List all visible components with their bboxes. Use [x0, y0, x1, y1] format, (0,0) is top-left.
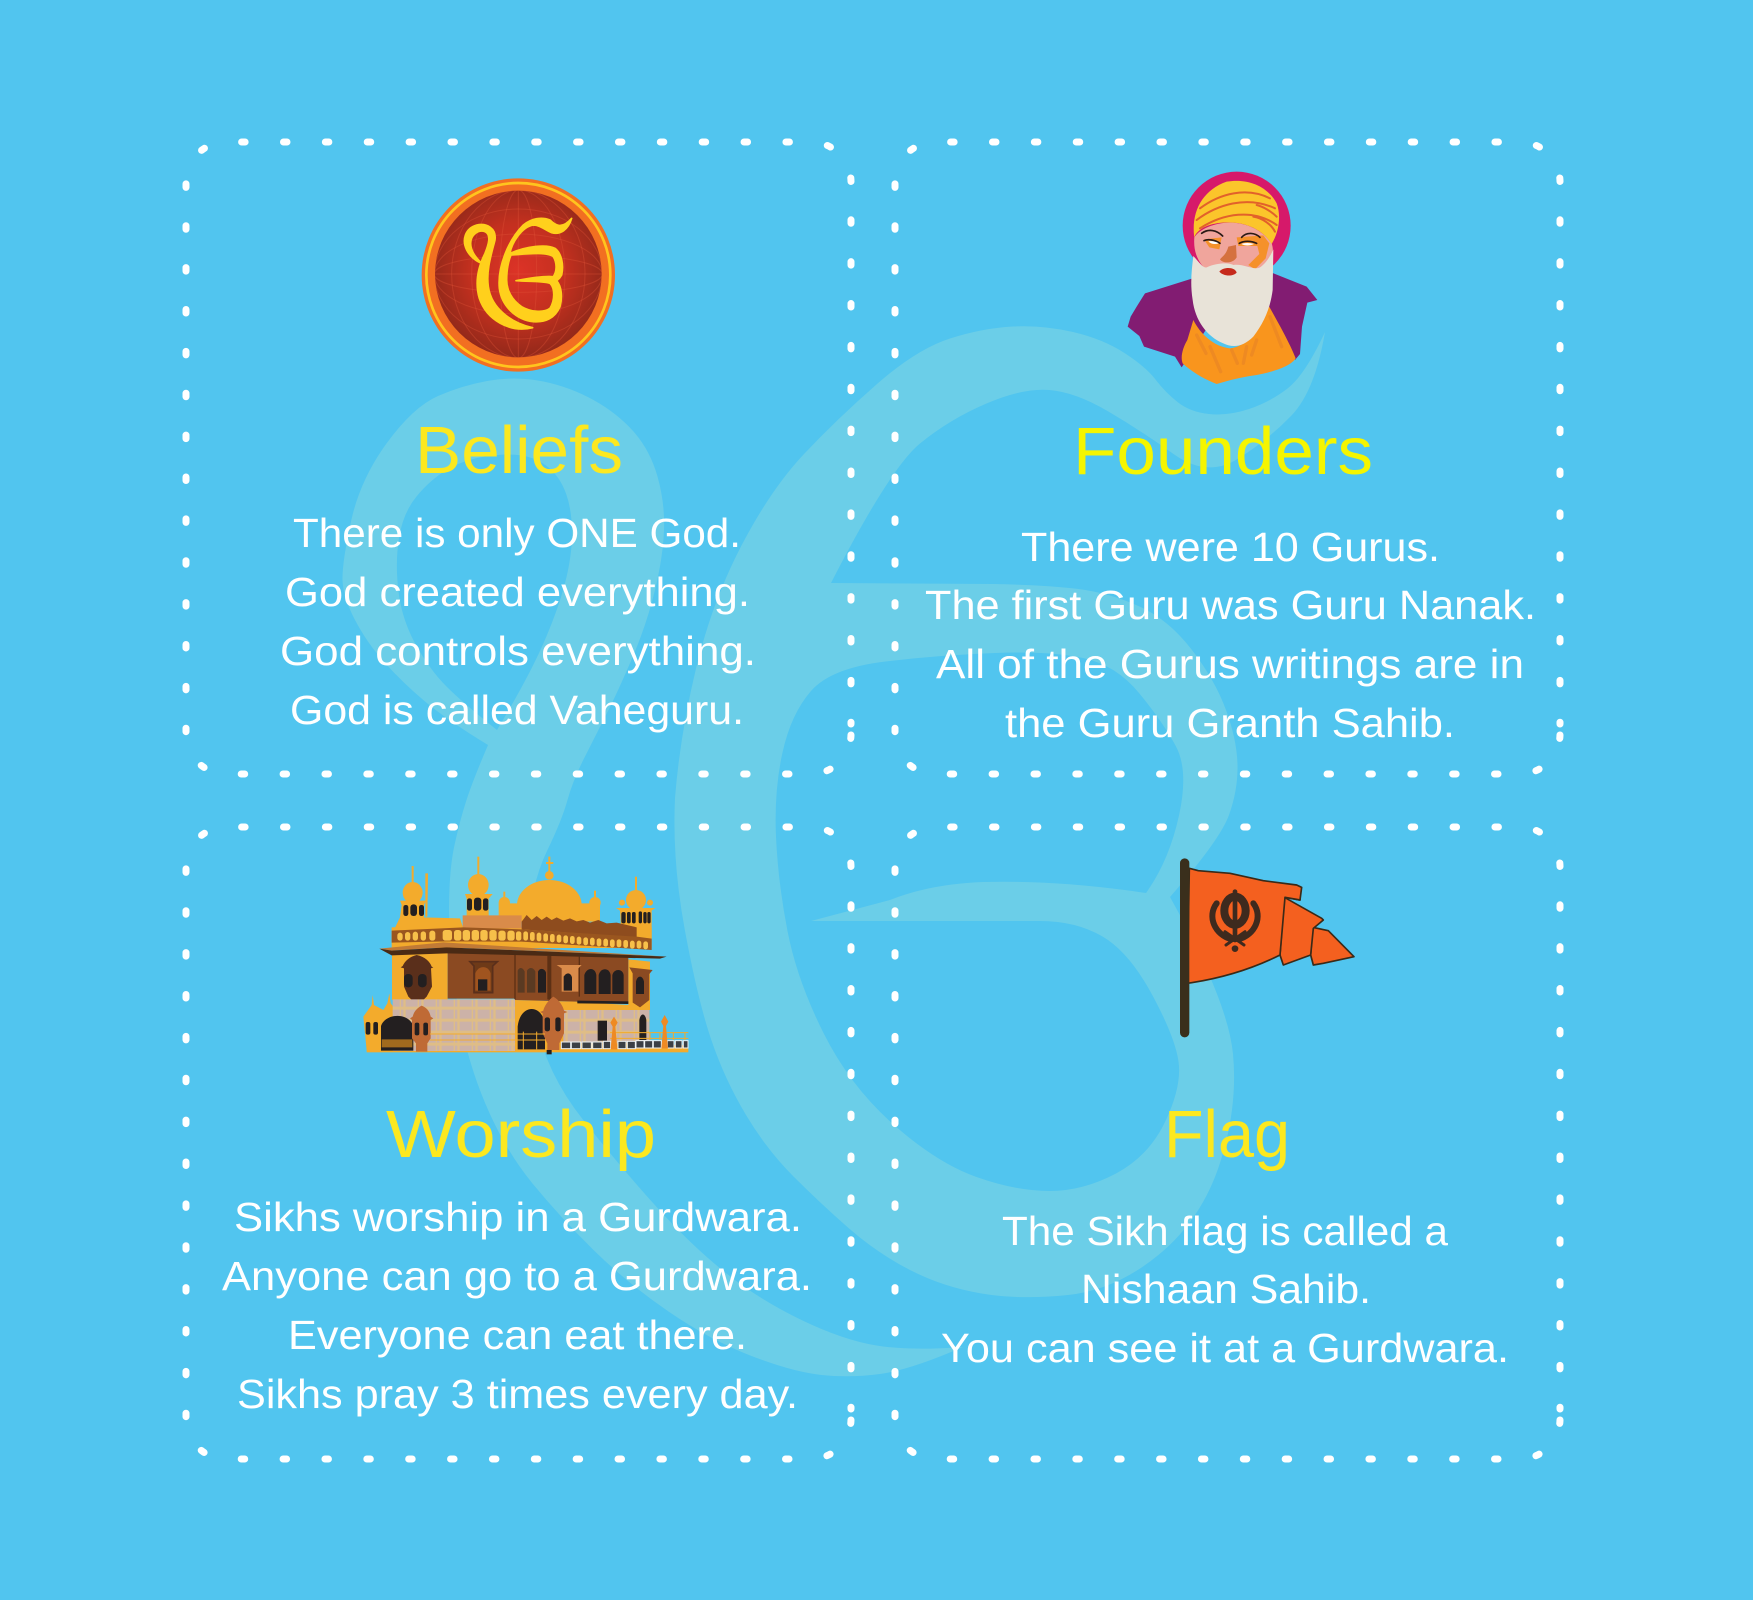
text block: beliefs: God is called Vaheguru.	[290, 687, 744, 733]
icon: Golden Temple	[363, 857, 688, 1054]
text block: founders: All of the Gurus writings are in	[936, 641, 1524, 687]
panel: founders	[895, 142, 1560, 774]
text block: beliefs	[280, 510, 756, 733]
text block: worship: Sikhs worship in a Gurdwara.	[234, 1194, 802, 1240]
text block: founders	[925, 524, 1536, 746]
text block: flag: The Sikh flag is called a	[1002, 1208, 1448, 1254]
text block: beliefs: God controls everything.	[280, 628, 756, 674]
heading: founders: Founders	[1073, 414, 1373, 489]
temple windows	[403, 898, 651, 923]
heading: worship: Worship	[386, 1097, 656, 1172]
panel: flag	[895, 827, 1560, 1459]
text block: beliefs: There is only ONE God.	[293, 510, 741, 556]
text block: founders: the Guru Granth Sahib.	[1005, 700, 1455, 746]
temple eave	[379, 942, 667, 957]
temple upper windows	[470, 962, 497, 993]
dotted border: beliefs	[186, 142, 851, 774]
temple doors and arches	[366, 1009, 646, 1051]
icon: Ek Onkar globe badge	[422, 178, 615, 372]
text block: worship: Everyone can eat there.	[288, 1312, 747, 1358]
temple brown wall	[448, 952, 628, 1003]
icon: Nishaan Sahib flag	[1180, 858, 1354, 1037]
watermark: Ek Onkar symbol	[342, 326, 1325, 1376]
panel: beliefs	[186, 142, 851, 774]
dotted border: flag	[895, 827, 1560, 1459]
heading: beliefs: Beliefs	[415, 413, 623, 488]
dotted border: founders	[895, 142, 1560, 774]
temple railing	[430, 1032, 688, 1049]
temple parapet	[392, 927, 652, 950]
text block: flag: Nishaan Sahib.	[1081, 1266, 1371, 1312]
temple tile walls	[393, 999, 515, 1051]
text block: founders: There were 10 Gurus.	[1021, 524, 1440, 570]
text block: beliefs: God created everything.	[285, 569, 750, 615]
dotted border: worship	[186, 827, 851, 1459]
panel: worship	[186, 827, 851, 1459]
icon: Guru Nanak portrait	[1128, 172, 1317, 384]
temple lanterns	[410, 997, 567, 1052]
text block: founders: The first Guru was Guru Nanak.	[925, 582, 1536, 628]
text block: worship	[222, 1194, 812, 1417]
heading: flag: Flag	[1164, 1097, 1290, 1172]
text block: worship: Sikhs pray 3 times every day.	[237, 1371, 798, 1417]
text block: worship: Anyone can go to a Gurdwara.	[222, 1253, 812, 1299]
temple balcony	[401, 955, 433, 1006]
text block: flag	[941, 1208, 1509, 1371]
text block: flag: You can see it at a Gurdwara.	[941, 1325, 1509, 1371]
flag emblem: khanda	[1212, 892, 1258, 945]
